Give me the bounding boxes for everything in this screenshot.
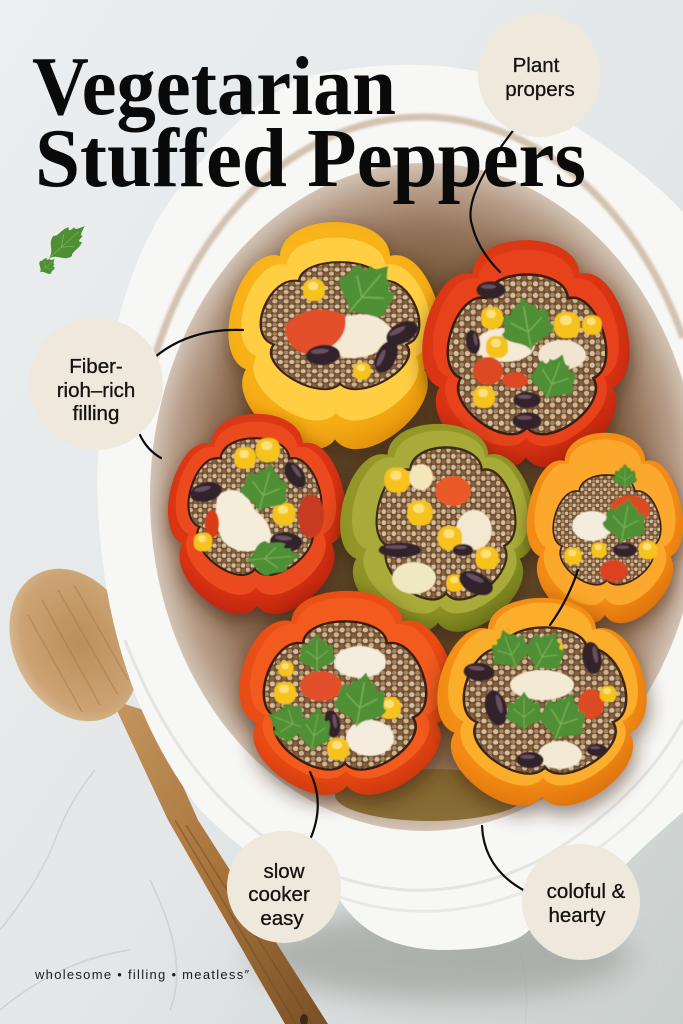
wooden spoon: [0, 546, 328, 1024]
callout: fiber-rich filling: [29, 318, 243, 458]
pepper: red top right: [422, 240, 632, 475]
garnish: cilantro sprig: [35, 216, 94, 278]
callout: slow cooker easy: slow: [263, 860, 305, 883]
pepper: yellow: [228, 222, 444, 457]
leader line: pepper filling: [550, 570, 578, 625]
title: [32, 40, 586, 205]
pepper: red left: [168, 414, 348, 622]
callout: fiber-rich filling: rioh–rich: [57, 379, 135, 402]
pepper: red-orange bottom: [239, 591, 457, 803]
slow cooker dish: [97, 65, 683, 950]
callout: colorful and hearty: hearty: [549, 904, 606, 927]
callout: slow cooker easy: easy: [260, 907, 304, 930]
callout: fiber-rich filling: filling: [73, 402, 119, 425]
callout: plant propers: propers: [505, 78, 575, 101]
title: Stuffed Peppers: [35, 112, 586, 205]
tagline: wholesome • filling • meatless″: [34, 967, 250, 982]
pepper: yellow-orange bottom: [437, 598, 649, 814]
callout: slow cooker easy: [227, 772, 341, 943]
callout: plant propers: [470, 13, 600, 272]
callout: colorful and hearty: coloful &: [547, 880, 626, 903]
callout: colorful and hearty: [482, 826, 640, 960]
callout: slow cooker easy: cooker: [248, 883, 310, 906]
pepper: orange right: [527, 433, 683, 631]
pepper: green: [340, 424, 538, 640]
callout: fiber-rich filling: Fiber-: [69, 355, 123, 378]
callout: plant propers: Plant: [513, 54, 560, 77]
title: Vegetarian: [32, 40, 396, 133]
